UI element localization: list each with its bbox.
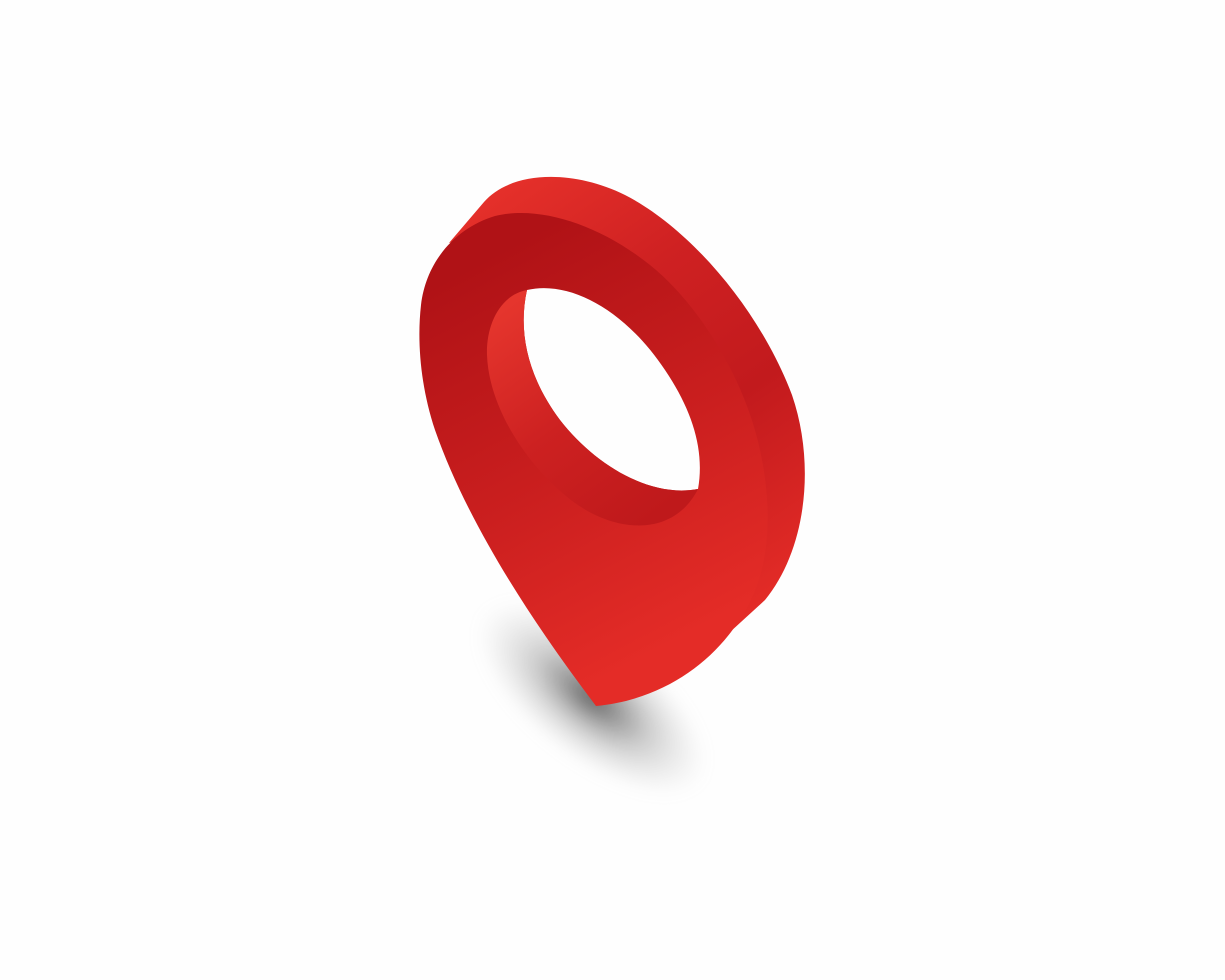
pin side extrusion: [449, 177, 805, 654]
shadow: [445, 564, 739, 832]
inner wall of hole: [487, 290, 698, 525]
pin front face with hole: [419, 213, 768, 706]
